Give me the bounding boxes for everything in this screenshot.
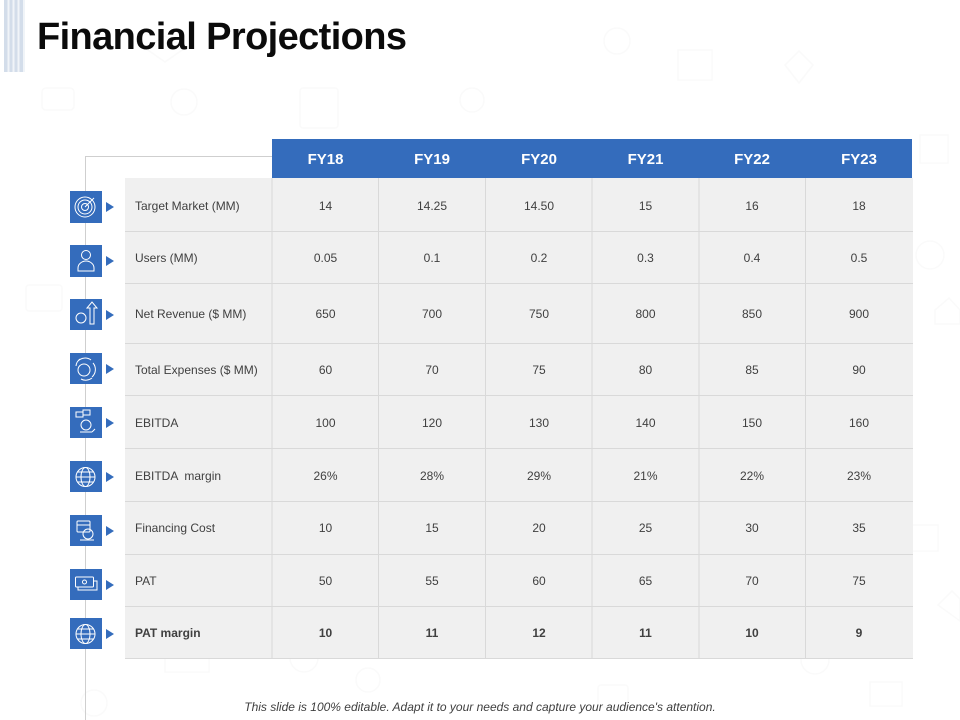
row: EBITDA margin: 23% — [847, 469, 871, 483]
row: PAT margin: 11 — [426, 626, 439, 640]
row: Target Market: Target Market (MM) — [135, 199, 240, 213]
row: PAT margin: 12 — [532, 626, 546, 640]
row: Users: 0.1 — [424, 251, 441, 265]
timeline connector line — [86, 156, 272, 720]
row: Total Expenses: 75 — [532, 363, 546, 377]
row: Net Revenue — [70, 299, 869, 330]
row: Users: Users (MM) — [135, 251, 198, 265]
row: Net Revenue: 900 — [849, 307, 869, 321]
row: Net Revenue: 700 — [422, 307, 442, 321]
row: PAT: 70 — [745, 574, 759, 588]
row: Total Expenses: 85 — [745, 363, 759, 377]
table header: FY23 — [841, 151, 877, 168]
decorative stripes top left — [4, 0, 25, 72]
row: Financing Cost: 30 — [745, 521, 759, 535]
row: PAT — [70, 569, 866, 600]
row: PAT margin: 10 — [319, 626, 332, 640]
row: Users: 0.05 — [314, 251, 338, 265]
row: Users: 0.4 — [744, 251, 761, 265]
row: Net Revenue: 750 — [529, 307, 549, 321]
row: Users: 0.3 — [637, 251, 654, 265]
table header: FY20 — [521, 151, 557, 168]
row: Target Market — [70, 191, 866, 223]
row: Total Expenses: 90 — [852, 363, 866, 377]
row: Target Market: 18 — [852, 199, 866, 213]
table body background — [125, 178, 913, 658]
row: PAT: 75 — [852, 574, 866, 588]
row: Net Revenue: 850 — [742, 307, 762, 321]
table header: FY18 — [308, 151, 343, 168]
row: EBITDA margin: 21% — [633, 469, 658, 483]
row: PAT margin: 10 — [745, 626, 759, 640]
table grid lines — [125, 178, 913, 658]
row: PAT: 60 — [532, 574, 546, 588]
row: Users: 0.5 — [851, 251, 868, 265]
row: PAT: 65 — [639, 574, 652, 588]
row: PAT margin: 11 — [639, 626, 652, 640]
row: EBITDA: 100 — [315, 416, 336, 430]
row: Financing Cost: 10 — [319, 521, 332, 535]
table header: FY19 — [414, 151, 450, 168]
row: EBITDA margin: 29% — [527, 469, 551, 483]
row: Net Revenue: Net Revenue ($ MM) — [135, 307, 246, 321]
row: PAT: PAT — [135, 574, 157, 588]
row: Financing Cost — [70, 515, 866, 546]
table header: FY21 — [628, 151, 663, 168]
row: EBITDA margin: 28% — [420, 469, 444, 483]
row: PAT margin — [70, 618, 863, 649]
row: EBITDA: 140 — [635, 416, 656, 430]
row: EBITDA margin — [70, 461, 871, 492]
row: Target Market: 15 — [639, 199, 652, 213]
row: Target Market: 14.50 — [524, 199, 554, 213]
footer note: This slide is 100% editable. Adapt it to your needs and capture your audience's attention. — [244, 700, 716, 714]
row: EBITDA margin: 22% — [740, 469, 764, 483]
table header: FY22 — [734, 151, 770, 168]
row: Total Expenses: Total Expenses ($ MM) — [135, 363, 258, 377]
row: Financing Cost: Financing Cost — [135, 521, 216, 535]
row: PAT margin: PAT margin — [135, 626, 201, 640]
row: Users — [70, 245, 868, 277]
row: EBITDA: 130 — [529, 416, 549, 430]
row: Total Expenses: 80 — [639, 363, 652, 377]
row: EBITDA: 150 — [742, 416, 762, 430]
table header — [272, 139, 912, 178]
row: Target Market: 14 — [319, 199, 332, 213]
row: Total Expenses: 70 — [425, 363, 439, 377]
row: EBITDA — [70, 407, 869, 438]
row: Target Market: 16 — [745, 199, 759, 213]
row: EBITDA margin: EBITDA margin — [135, 469, 221, 483]
title: Financial Projections — [37, 16, 407, 58]
row: Total Expenses — [70, 353, 866, 384]
row: EBITDA: EBITDA — [135, 416, 178, 430]
row: PAT: 55 — [425, 574, 439, 588]
row: Financing Cost: 15 — [425, 521, 439, 535]
row: Financing Cost: 20 — [532, 521, 546, 535]
row: Total Expenses: 60 — [319, 363, 332, 377]
row: PAT: 50 — [319, 574, 332, 588]
row: Financing Cost: 35 — [852, 521, 866, 535]
row: Net Revenue: 800 — [635, 307, 656, 321]
row: EBITDA margin: 26% — [313, 469, 338, 483]
row: Target Market: 14.25 — [417, 199, 447, 213]
row: Financing Cost: 25 — [639, 521, 652, 535]
row: PAT margin: 9 — [856, 626, 863, 640]
row: EBITDA: 160 — [849, 416, 869, 430]
row: Net Revenue: 650 — [315, 307, 336, 321]
row: EBITDA: 120 — [422, 416, 442, 430]
row: Users: 0.2 — [531, 251, 548, 265]
